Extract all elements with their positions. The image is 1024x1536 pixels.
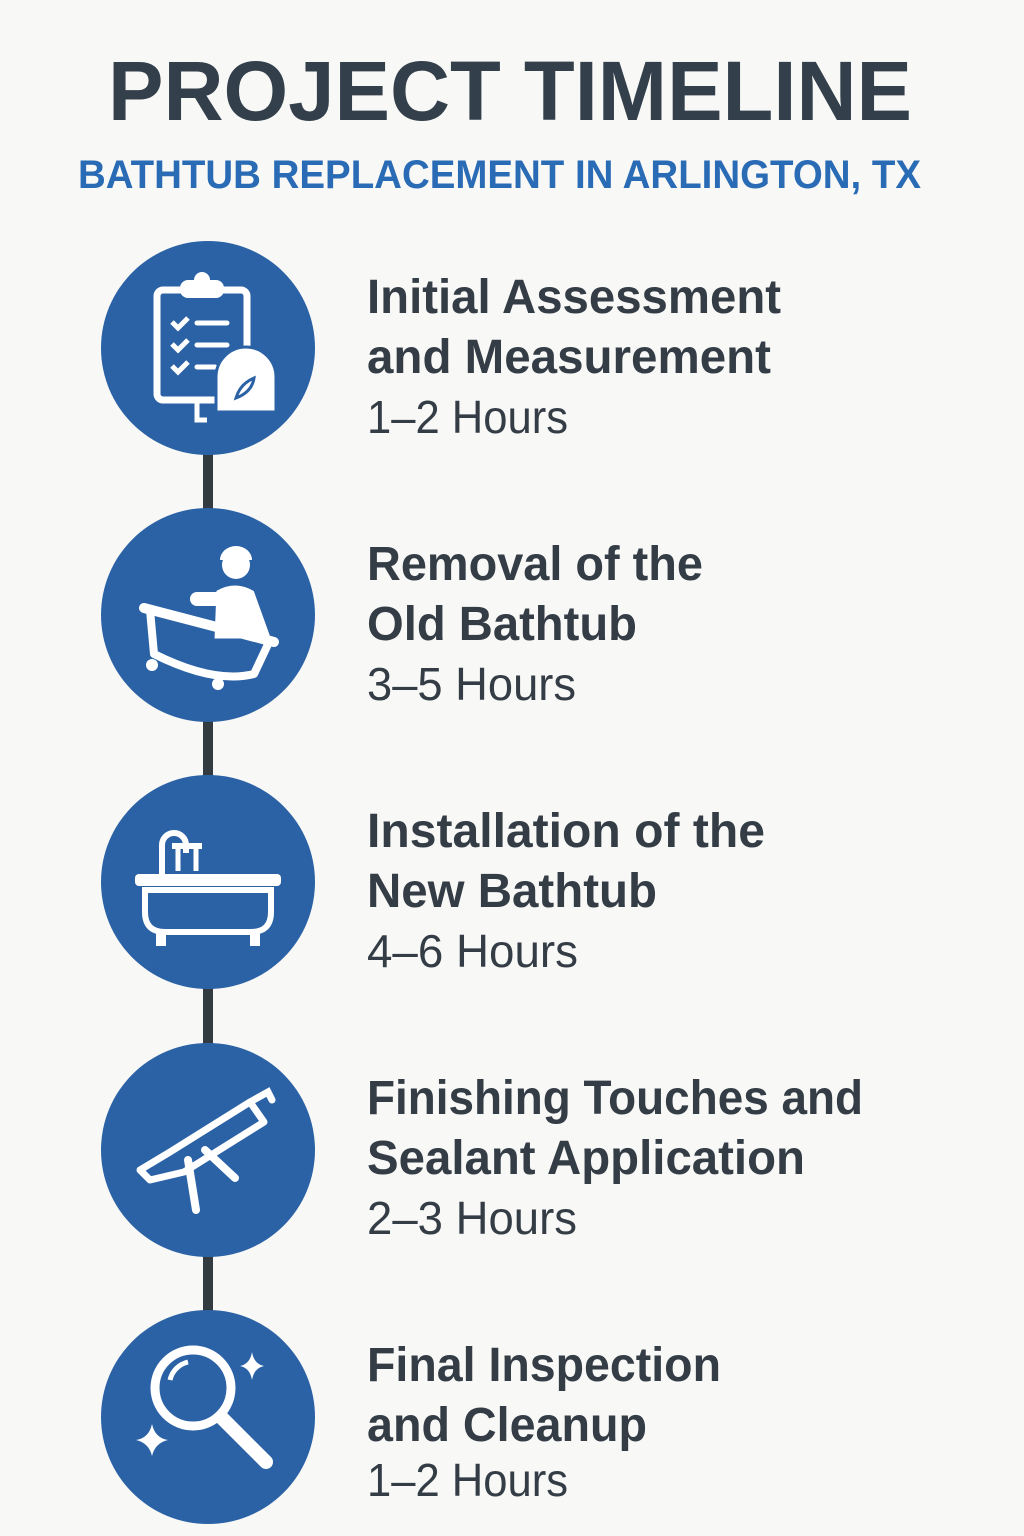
step 1: initial assessment [101, 241, 781, 455]
text: step 1: and Measurement [367, 331, 771, 384]
icon: worker removing tub [101, 508, 315, 722]
subtitle: BATHTUB REPLACEMENT IN ARLINGTON, TX [78, 153, 921, 197]
text: step 5: Final Inspection [367, 1339, 721, 1392]
step 2: removal [101, 508, 703, 722]
text: step 3: Installation of the [367, 805, 765, 858]
step 5: final inspection [101, 1310, 721, 1524]
text: step 4: Sealant Application [367, 1132, 805, 1185]
title: PROJECT TIMELINE [108, 44, 912, 138]
text: step 5: and Cleanup [367, 1399, 647, 1452]
text: step 1: 1–2 Hours [367, 391, 568, 443]
text: step 5: 1–2 Hours [367, 1454, 568, 1506]
icon: caulk gun [101, 1043, 315, 1257]
icon: new bathtub [101, 775, 315, 989]
text: step 3 [367, 805, 765, 977]
text: step 2: Old Bathtub [367, 598, 637, 651]
text: step 2: 3–5 Hours [367, 658, 576, 710]
text: step 2 [367, 538, 703, 710]
text: step 2: Removal of the [367, 538, 703, 591]
step 3: installation [101, 775, 765, 989]
icon: clipboard and tape measure [101, 241, 315, 455]
icon: magnifier with sparkles [101, 1310, 315, 1524]
text: step 1: Initial Assessment [367, 271, 781, 324]
text: step 4: Finishing Touches and [367, 1072, 863, 1125]
timeline connector line [203, 440, 213, 1320]
step 4: finishing [101, 1043, 863, 1257]
text: step 4: 2–3 Hours [367, 1192, 577, 1244]
text: step 5 [367, 1339, 721, 1506]
text: step 4 [367, 1072, 863, 1244]
text: step 3: New Bathtub [367, 865, 657, 918]
text: step 1 [367, 271, 781, 443]
text: step 3: 4–6 Hours [367, 925, 578, 977]
